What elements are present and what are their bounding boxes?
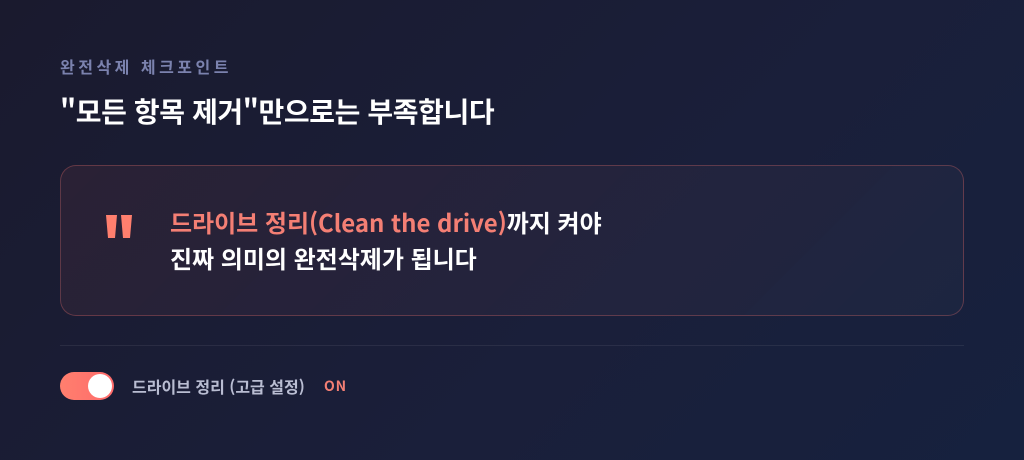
eyebrow label: 완전삭제 체크포인트: [60, 54, 232, 78]
icon: quotation mark: [106, 215, 132, 238]
callout text: 진짜 의미의 완전삭제가 됩니다: [170, 240, 477, 275]
title: "모든 항목 제거"만으로는 부족합니다: [60, 91, 494, 131]
callout text: [170, 204, 602, 275]
callout text: 드라이브 정리(Clean the drive)까지 켜야: [170, 204, 602, 239]
status: on: ON: [324, 376, 347, 396]
toggle label: 드라이브 정리 (고급 설정): [132, 374, 305, 398]
toggle knob: [88, 374, 112, 398]
toggle switch: [60, 372, 114, 400]
divider: [60, 345, 964, 346]
panel: callout: [60, 165, 964, 316]
